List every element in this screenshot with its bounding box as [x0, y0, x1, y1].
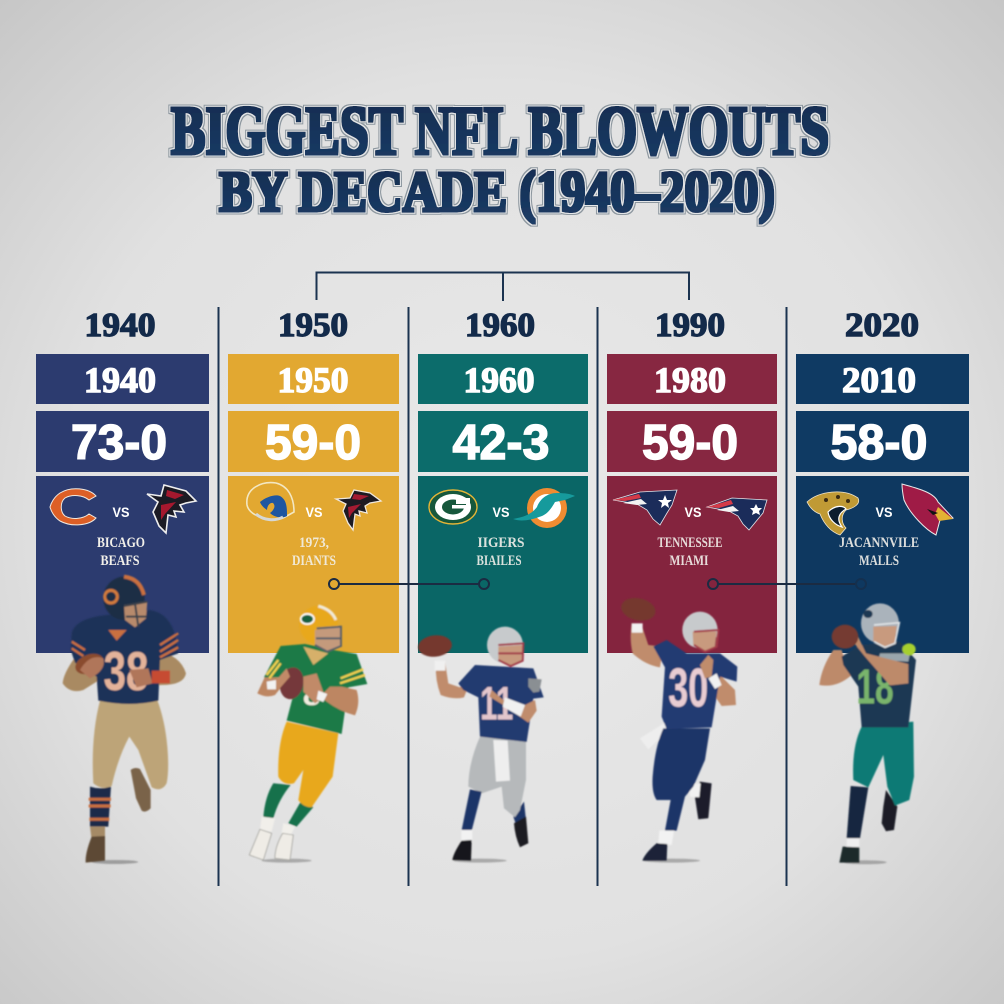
panel: 1980 card [607, 354, 777, 653]
icon: falcon logo [147, 485, 196, 533]
player: packers quarterback [249, 606, 367, 863]
year label: 1940 [84, 360, 156, 400]
panel: 1940 card [36, 354, 209, 653]
vs label: VS [492, 504, 510, 520]
team names: MIAMI [670, 553, 709, 569]
score: 73-0 [71, 416, 167, 470]
team names: IIGERS [478, 535, 524, 551]
player: seahawks quarterback: 18 [856, 659, 894, 714]
team names [658, 535, 722, 569]
score: 58-0 [830, 416, 928, 470]
year label: 1980 [654, 360, 726, 400]
score: 42-3 [452, 416, 550, 470]
team names [839, 535, 919, 569]
icon: cardinal logo [902, 484, 953, 535]
icon: rams logo [247, 483, 294, 520]
year label: 2010 [842, 360, 916, 400]
team names [476, 535, 524, 569]
team names: DIANTS [292, 553, 336, 569]
vs label: VS [876, 504, 892, 520]
team names [97, 535, 145, 569]
column heading: 1950: 1950 [278, 307, 348, 344]
vs label: VS [306, 504, 322, 520]
icon: packers G logo [429, 490, 477, 524]
icon: patriots logo [613, 490, 677, 525]
team names [292, 535, 336, 569]
team names: BIAILES [476, 553, 522, 569]
column heading: 2020: 2020 [845, 307, 919, 344]
column heading: 1990: 1990 [655, 307, 725, 344]
year label: 1950 [278, 360, 348, 400]
panel: 2010 card [796, 354, 969, 653]
icon: dolphin logo [513, 488, 575, 528]
team names: BICAGO [97, 535, 145, 551]
panel: 1960 card [418, 354, 588, 653]
player: seahawks quarterback [819, 603, 916, 864]
player: patriots quarterback [619, 595, 737, 863]
year label: 1960 [464, 360, 534, 400]
connector: 1980 to 2010 [708, 579, 866, 589]
score: 59-0 [265, 416, 361, 470]
panel: 1950 card [228, 354, 399, 653]
vs label: VS [112, 504, 130, 520]
icon: jaguar logo [807, 492, 859, 535]
player: raiders quarterback [417, 627, 544, 863]
column heading: 1960: 1960 [465, 307, 535, 344]
icon: patriots logo [707, 498, 767, 530]
player: patriots quarterback: 30 [668, 657, 708, 719]
connector: 1950 to 1960 [329, 579, 489, 589]
title: BY DECADE (1940–2020) [219, 159, 775, 224]
icon: bears C logo [50, 489, 96, 525]
player: packers quarterback: 8 [303, 676, 320, 712]
player: raiders quarterback: 11 [480, 677, 513, 730]
icon: falcon logo [336, 490, 381, 530]
team names: 1973, [299, 535, 329, 551]
team names: BEAFS [100, 553, 140, 569]
column dividers [218, 307, 786, 886]
player: bears running back [63, 577, 186, 864]
vs label: VS [684, 504, 702, 520]
team names: TENNESSEE [658, 535, 722, 551]
bracket connector [316, 272, 689, 301]
score: 59-0 [642, 416, 738, 470]
column heading: 1940: 1940 [84, 307, 156, 344]
team names: MALLS [859, 553, 899, 569]
player: bears running back: 38 [103, 640, 148, 702]
team names: JACANNVILE [839, 535, 919, 551]
title [171, 93, 829, 224]
